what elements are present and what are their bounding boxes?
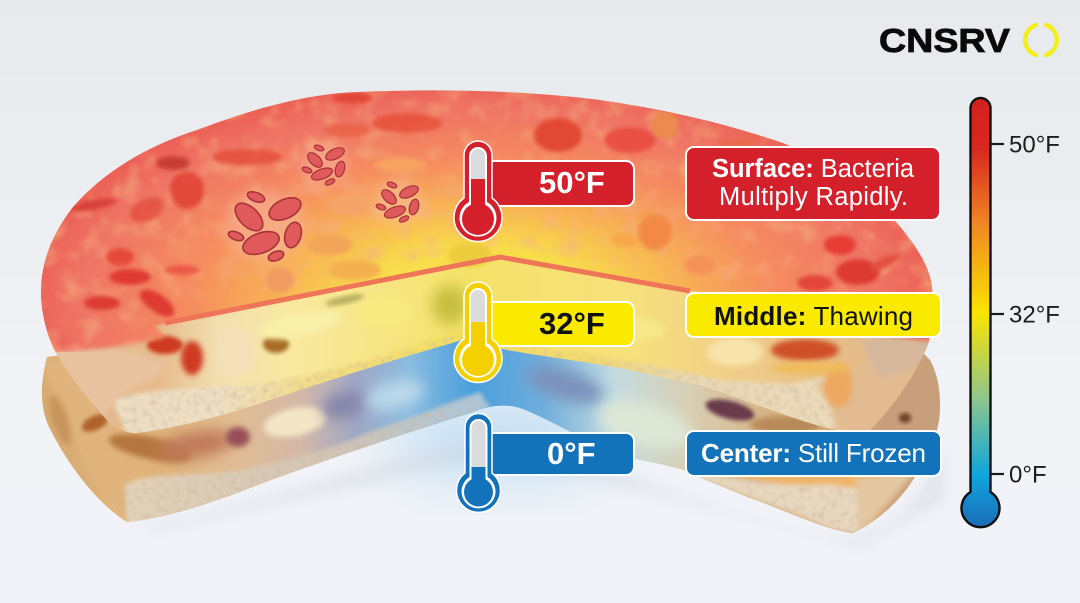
callout text: Middle: Thawing (714, 301, 913, 331)
scale labels: 50°F (1009, 132, 1060, 158)
upper pizza layer (20, 80, 960, 440)
lower cheese patches (153, 425, 237, 465)
bacteria: upper cluster (300, 143, 348, 187)
lower left crust (44, 356, 131, 522)
icon: thermometer (454, 282, 502, 382)
logo (879, 22, 1057, 59)
callout: surface (686, 147, 940, 220)
temperature tag (478, 302, 634, 346)
callout: center (686, 431, 941, 476)
scale labels (1009, 132, 1060, 488)
lower left bread band (125, 392, 490, 528)
icon: thermometer (456, 414, 500, 512)
callout: middle (686, 293, 941, 337)
temperature tag (478, 433, 634, 475)
scale thermometer (962, 98, 1000, 527)
lower right cheese and bread (734, 477, 882, 488)
crust (56, 350, 164, 416)
cut face (30, 240, 950, 440)
bacteria: right cluster (374, 180, 422, 224)
separation line (165, 257, 690, 323)
logo ring (1025, 25, 1057, 55)
lower pizza layer (42, 340, 940, 533)
temperature tag (478, 161, 634, 206)
callout text: Center: Still Frozen (701, 438, 926, 468)
readout: 50°F (454, 141, 634, 241)
scale ticks (990, 144, 1004, 474)
temperature scale (962, 98, 1060, 527)
logo wordmark: CNSRV (879, 22, 1010, 59)
scale labels: 32°F (1009, 302, 1060, 328)
bread band (112, 331, 844, 433)
pizza illustration (20, 80, 960, 548)
shadow on table (140, 430, 945, 548)
cold glow beneath pizza (390, 402, 610, 478)
lower right patches (525, 362, 609, 410)
bacteria: large cluster (225, 190, 305, 263)
surface line cover (155, 246, 706, 325)
sauce patches (147, 336, 183, 354)
temperature value: 32°F (539, 306, 605, 341)
surface blotches (68, 93, 902, 322)
callout text (712, 155, 915, 211)
temperature value: 50°F (539, 165, 605, 200)
callout text: Surface: Bacteria (712, 155, 915, 183)
callout text: Multiply Rapidly. (719, 183, 908, 211)
temperature value: 0°F (547, 436, 596, 471)
icon: thermometer (454, 141, 502, 241)
readout: 0°F (456, 414, 634, 512)
readout: 32°F (454, 282, 634, 382)
heated surface (20, 80, 960, 352)
scale labels: 0°F (1009, 462, 1047, 488)
